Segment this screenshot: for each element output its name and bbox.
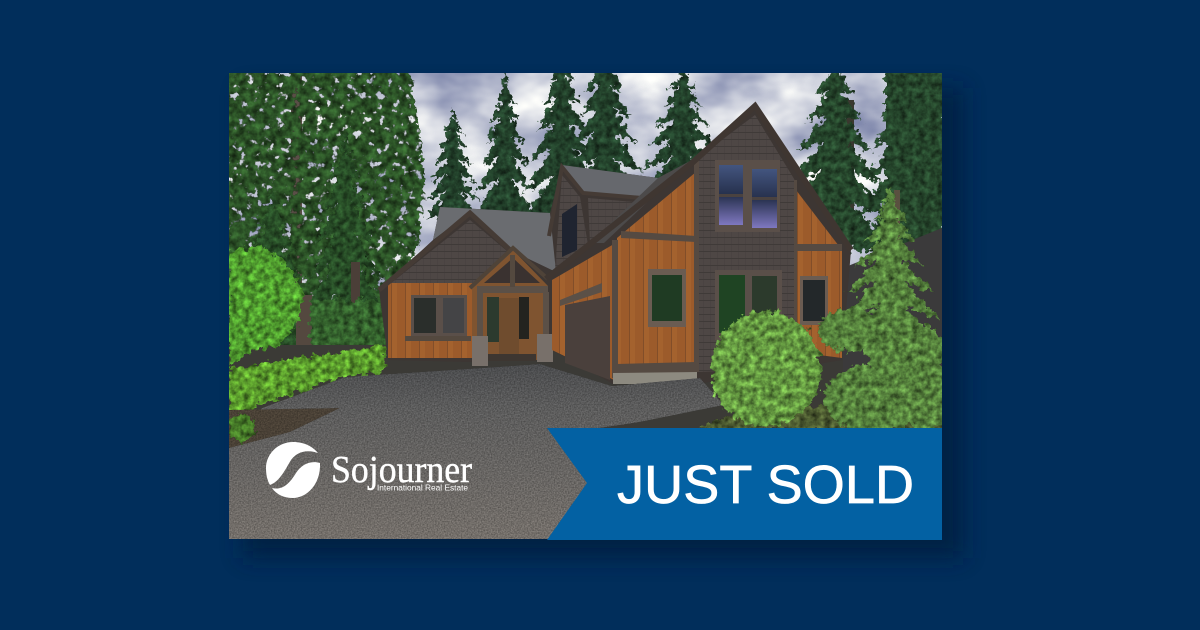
sky: [229, 73, 942, 373]
right orange wall: [796, 190, 842, 358]
mid-ground hedges: [310, 300, 388, 355]
dirt edge: [229, 408, 340, 448]
front wall: [388, 283, 474, 358]
lawn: [229, 345, 385, 412]
right forest: [796, 73, 942, 254]
banner text: JUST SOLD: [617, 455, 914, 515]
front gable siding: [390, 220, 507, 284]
bright shrub at left: [229, 246, 303, 368]
foundation: [613, 372, 697, 384]
lower tower window: [715, 270, 782, 340]
dormer roof: [562, 165, 658, 198]
front gable trim: [379, 213, 510, 290]
background firs behind the house: [423, 73, 711, 220]
pine in foreground: [818, 185, 951, 432]
logo wordmark: Sojourner: [331, 449, 472, 491]
card shadow: [243, 88, 963, 558]
right wall window: [800, 276, 828, 325]
ground shrubs under the bush: [700, 405, 942, 430]
just sold banner: [547, 428, 942, 540]
main gable shingle tower: [698, 115, 796, 372]
front window: [405, 295, 471, 341]
small left shrub: [227, 414, 255, 442]
house: [379, 104, 851, 384]
right rose bush: [711, 311, 821, 427]
neighbouring dark house: [846, 228, 942, 338]
company logo: [266, 442, 472, 498]
house silhouette backing: [379, 110, 851, 349]
rear roof: [433, 207, 556, 272]
dormer windows: [562, 204, 577, 257]
house photo: [229, 73, 942, 539]
stone pillars: [472, 334, 553, 366]
upper tower window: [715, 160, 780, 232]
dormer trim: [549, 167, 642, 236]
entry portico: [470, 248, 549, 361]
horizontal trim bands: [612, 160, 842, 378]
main wall window: [648, 269, 686, 327]
driveway: [229, 364, 724, 539]
infographic canvas: [229, 73, 968, 562]
ground base: [229, 345, 936, 428]
roof slope: [596, 162, 688, 243]
logo mark: [266, 442, 320, 498]
banner shape: [547, 428, 942, 540]
main gable roof edge: [546, 106, 851, 279]
dormer walls: [555, 175, 634, 270]
garage door: [560, 283, 610, 380]
main orange wall: [617, 172, 696, 372]
garage side wall: [552, 244, 614, 380]
logo tagline: International Real Estate: [377, 484, 469, 492]
left forest: [225, 70, 425, 365]
